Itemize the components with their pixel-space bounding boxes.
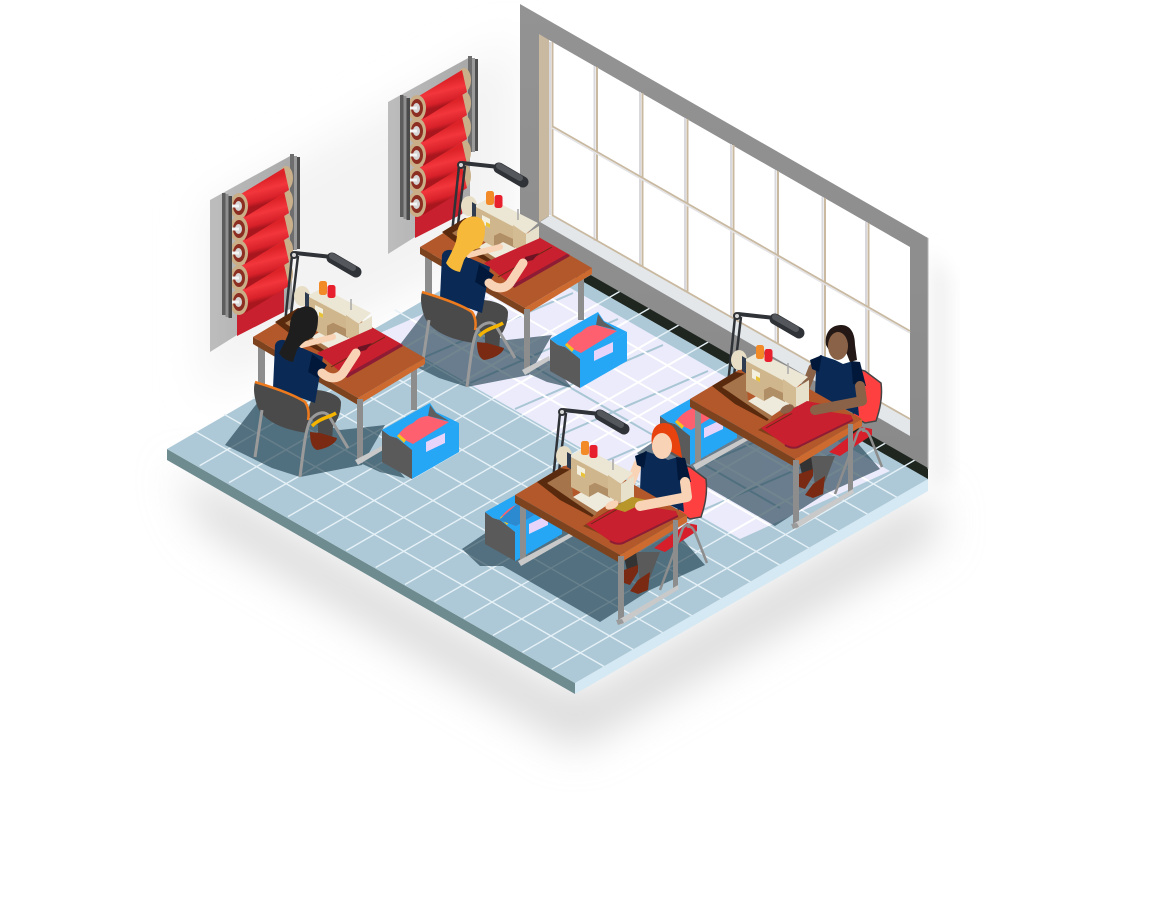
window mullions (550, 42, 910, 419)
workstation: red-haired seamstress facing viewer (515, 409, 707, 625)
window glass (549, 40, 910, 422)
storage box: left station (382, 403, 459, 479)
floor platform (167, 275, 928, 694)
floor tile grid (195, 275, 916, 670)
fabric rack: left wall (210, 154, 300, 352)
faint shadow on left wall near racks (205, 40, 515, 395)
isometric sewing workshop illustration (167, 4, 950, 755)
sunlight patch on floor (380, 266, 890, 539)
floor left side (167, 449, 575, 694)
floor right side (575, 479, 928, 694)
storage box: back station (550, 312, 627, 388)
faint shadow beside the window wall (930, 250, 950, 490)
worker head: red-haired seamstress (652, 423, 682, 459)
storage box: right station (660, 389, 737, 465)
background soft shadow under floor (178, 470, 938, 745)
worker head: dark-skinned seamstress (826, 325, 857, 362)
window sill (540, 215, 910, 436)
workstation: dark-skinned seamstress facing viewer (690, 313, 882, 529)
window shadow lines on sunlight (425, 293, 844, 513)
window jamb (539, 34, 549, 222)
workstation: dark-haired seamstress from behind (253, 252, 425, 477)
storage box: front station (485, 485, 562, 561)
floor top (167, 245, 928, 683)
brighter tile grid on sunlight (406, 294, 870, 534)
wall base skirting (519, 234, 928, 480)
interior of front storage box (499, 498, 552, 526)
fabric rack: back wall (388, 56, 478, 254)
furniture shadows on floor (225, 312, 880, 622)
window wall (519, 4, 928, 480)
workstation: blonde seamstress from behind (420, 162, 592, 387)
